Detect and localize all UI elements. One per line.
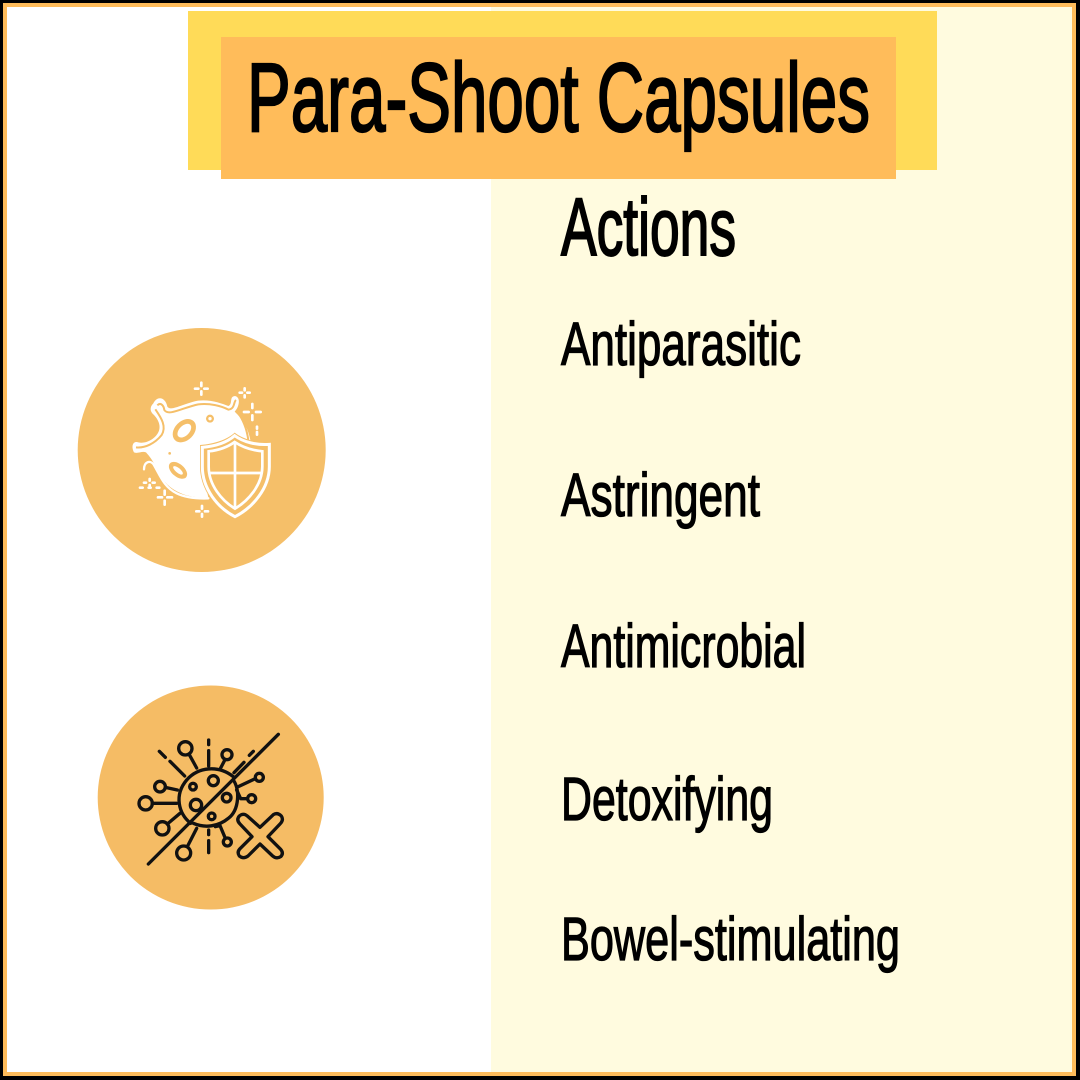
heading: actions: Actions (561, 182, 736, 273)
list item: detoxifying: Detoxifying (561, 765, 773, 833)
list item: antiparasitic: Antiparasitic (561, 310, 801, 378)
list item: antimicrobial: Antimicrobial (561, 612, 806, 680)
panel: actions background (491, 7, 1072, 1072)
icon: virus crossed out (98, 686, 324, 910)
icon: parasite with shield (78, 328, 326, 572)
title banner (188, 11, 937, 179)
list item: astringent: Astringent (561, 461, 760, 529)
list item: bowel-stimulating: Bowel-stimulating (561, 905, 900, 973)
